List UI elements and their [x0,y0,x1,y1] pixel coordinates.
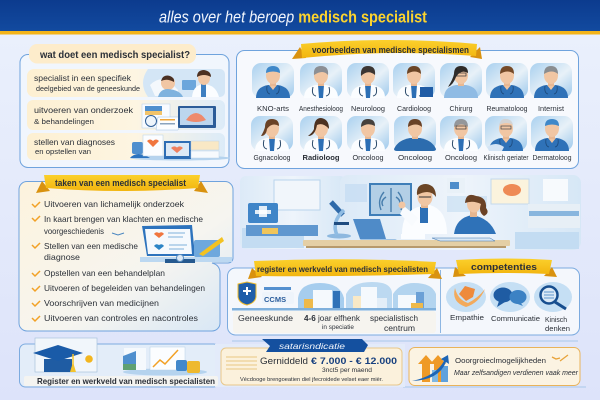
medical kit [246,203,318,236]
growth text: Ooorgroieclmogelijkheden [455,356,546,365]
portrait: Anesthesioloog: Anesthesioloog [299,104,343,113]
title: alles over het beroep medisch specialist [159,8,427,26]
labels: specialistisch [370,313,418,323]
ribbon heading: voorbeelden van medische specialismen [312,45,469,56]
portrait: Chirurg: Chirurg [450,104,472,113]
icon: patient and doctor [150,70,219,97]
competency labels [450,313,570,333]
portrait: Reumatoloog: Reumatoloog [486,104,528,113]
portrait: Oncoloog 3 [440,116,482,162]
background bands [242,184,579,249]
check marks [32,202,40,321]
labels: 4-6 joar elfhenk [304,313,361,323]
laptop [353,219,397,242]
icon: empathie [446,282,486,312]
task list [44,199,205,323]
student [454,195,496,234]
icon: shield CCMS: CCMS [264,295,286,304]
heading pill [29,44,196,64]
row: diagnoses [27,133,230,160]
heading pill: wat doet een medisch specialist? [39,49,190,61]
portrait: KNO-arts: KNO-arts [257,104,289,113]
icon: pencil check [552,355,568,361]
task list: Stellen van een medische [44,241,138,251]
icon: graduation cap and certificate [33,338,97,372]
x-ray [369,183,412,216]
portrait: Anesthesioloog [299,63,343,113]
portrait: Internist: Internist [538,104,565,113]
header banner [0,0,600,34]
task list: Opstellen van een behandelplan [44,268,165,278]
portrait: Dermatoloog [531,116,573,162]
portrait: Cardioloog: Cardioloog [397,104,431,113]
row: onderzoek: uitvoeren van onderzoek [34,105,134,115]
ribbon: register en werkveld: register en werkveld van medisch specialisten [257,264,428,274]
icon: growth chart and coins [123,347,207,376]
row: onderzoek [27,100,225,130]
icon: monitor and forms [142,104,216,130]
task list: In kaart brengen van klachten en medische [44,214,203,224]
competency labels: Communicatie [491,314,540,323]
salary text: Gerniddeld [260,356,308,366]
wall pictures and devices [274,178,580,228]
portrait: Gynaecoloog: Ggnacoloog [254,153,290,162]
salary text: Vécdooge brengoeatien diel jfecroidede velset eaer mièr. [240,377,383,383]
portrait: Klinisch geriater: Klinisch geriater [484,155,529,162]
icon: hospital buildings [232,282,436,310]
panel: doorgroeimogelijkheden [409,348,580,386]
icon: shield CCMS [236,282,294,307]
microscope [327,202,351,238]
competency labels: denken [545,324,570,333]
labels [233,311,436,333]
row: diagnoses: en opstellen van [35,149,91,156]
panel: taken van een medisch specialist [19,175,233,331]
portrait: Radioloog: Radioloog [302,153,340,162]
ribbon heading [292,40,482,59]
portrait: Chirurg [440,63,482,113]
panel: voorbeelden van medische specialismen [236,40,578,168]
icon: communicatie [490,282,530,312]
portrait: Oncoloog 2 [394,116,436,162]
portrait: Gynaecoloog [251,116,293,162]
portrait: Internist [530,63,572,113]
competency labels: Empathie [450,313,484,322]
ribbon heading [262,339,368,352]
labels: in speciatie [322,325,355,331]
icon: heart reports [130,135,230,160]
portrait: Neuroloog: Neuroloog [351,104,385,113]
ribbon heading: satarisndicatie [279,341,345,351]
ribbon: competenties: competenties [471,262,537,273]
labels: centrum [384,323,415,333]
portrait: Neuroloog [347,63,389,113]
ribbon: register en werkveld [248,259,442,279]
doctor [398,184,447,234]
portrait: Oncoloog 1: Oncoloog [352,153,384,162]
panel: wat doet een medisch specialist [20,44,230,168]
row: specialist: specialist in een specifiek [34,73,132,83]
competency labels: Kinisch [545,315,567,324]
ribbon heading [36,175,208,193]
desk [303,234,510,248]
panel: register en werkveld + competenties [228,258,580,335]
panel: register banner [20,338,586,387]
panel: salarisindicatie [221,339,402,385]
row: specialist [27,69,225,97]
illustration: doctor shows x-ray [240,175,581,250]
icon: document lines [226,357,257,369]
portrait: Oncoloog 2: Oncoloog [398,153,432,162]
portrait: KNO-arts [252,63,294,113]
caption: Register en werkveld van medisch specialisten [37,376,215,386]
task list: Uitvoeren van lichamelijk onderzoek [44,199,185,209]
icon: kinisch denken [534,282,572,312]
salary text: € 7.000 - € 12.000 [311,356,397,367]
task list: Uitvoeren van controles en nacontroles [44,313,198,323]
task list: Uitvoeren of begeleiden van behandelingen [44,283,205,293]
ribbon heading: taken van een medisch specialist [55,178,186,188]
icon: arrows growth [412,355,449,382]
task list: Voorschrijven van medicijnen [44,298,159,308]
labels: Geneeskunde [238,313,293,323]
portrait: Klinisch geriater [484,116,529,162]
salary text: 3nct5 per maend [322,367,372,374]
growth text: Maar zelfsandigen verdienen vaak meer [454,370,579,377]
row: onderzoek: & behandelingen [34,117,94,126]
icon: clipboard screen [112,225,232,263]
task list: voorgeschiedenis [44,226,104,236]
salary text [240,356,397,383]
portrait: Dermatoloog: Dermatoloog [532,153,572,162]
ribbon: competenties [453,258,557,277]
growth text [454,356,579,377]
portrait: Radioloog [300,116,342,162]
row: diagnoses: stellen van diagnoses [34,137,115,147]
portrait: Oncoloog 3: Oncoloog [445,153,477,162]
task list: diagnose [44,252,80,262]
portrait: Cardioloog [393,63,435,113]
portrait: Oncoloog 1 [347,116,389,162]
portrait: Reumatoloog [486,63,528,113]
row: specialist: deelgebied van de geneeskunde [36,84,140,93]
